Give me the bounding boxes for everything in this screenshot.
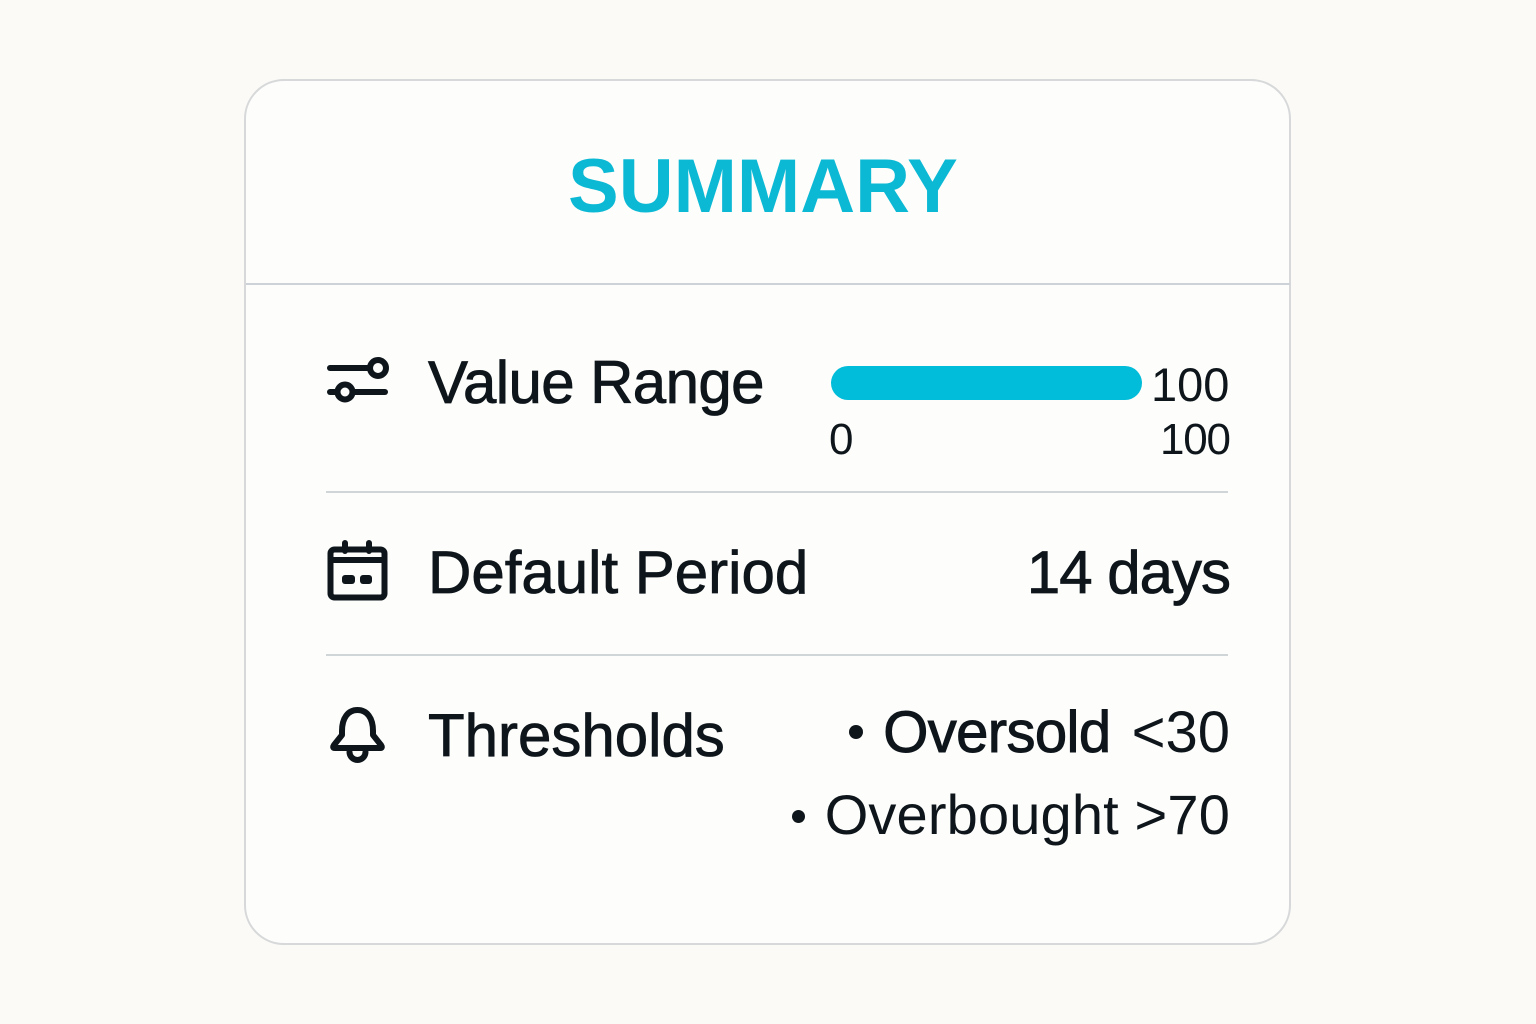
range bar end value: 100 xyxy=(1151,358,1229,411)
title: SUMMARY xyxy=(568,144,958,229)
value: 14 days: 14 days xyxy=(1027,539,1230,606)
icon: bell xyxy=(330,707,385,763)
label: thresholds: Thresholds xyxy=(428,702,725,769)
range max: 100 xyxy=(1160,415,1230,464)
range bar xyxy=(831,366,1142,400)
value: overbought: Overbought >70 xyxy=(825,783,1230,846)
range min: 0 xyxy=(829,415,853,464)
value: oversold: Oversold <30 xyxy=(883,700,1230,765)
label: value range: Value Range xyxy=(428,349,764,416)
panel: summary card xyxy=(244,79,1291,945)
icon: sliders xyxy=(327,357,389,402)
header divider xyxy=(246,283,1290,285)
label: default period: Default Period xyxy=(428,539,808,606)
icon: calendar xyxy=(328,540,388,600)
